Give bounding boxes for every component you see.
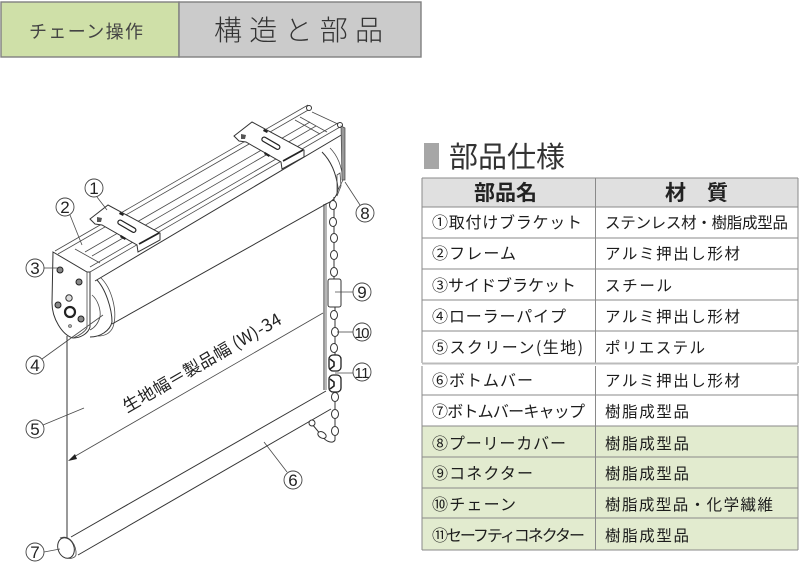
row 6: ⑥ボトムバー: [432, 367, 533, 391]
green rows background: [422, 426, 798, 550]
row 8: 樹脂成型品: [605, 432, 689, 454]
screen fabric edges: [67, 203, 326, 538]
row 2: アルミ押出し形材: [605, 242, 740, 264]
roller and pulley cover: [90, 148, 343, 337]
callout 2: 2: [60, 198, 70, 217]
row 8: [432, 430, 689, 454]
callout 7: 7: [30, 543, 40, 562]
row 3: ③サイドブラケット: [432, 272, 576, 296]
row 9: ⑨コネクター: [432, 460, 533, 484]
row 5: ⑤スクリーン(生地): [432, 334, 583, 358]
mounting bracket left: [90, 205, 160, 252]
table grid: [422, 178, 798, 550]
table header: 材 質: [665, 177, 728, 207]
callout 5: [26, 408, 84, 439]
callout 2: [56, 198, 82, 245]
width dimension arrow: [68, 313, 323, 461]
tab: chain operation: [1, 2, 179, 57]
callout 8: 8: [360, 204, 370, 223]
callout 8: [345, 182, 374, 223]
row 6: [432, 367, 740, 391]
row 1: ステンレス材・樹脂成型品: [605, 211, 788, 233]
callout 10: [337, 323, 371, 342]
row 4: ④ローラーパイプ: [432, 303, 566, 327]
callout 11: [335, 363, 371, 382]
section heading: parts specification: 部品仕様: [449, 134, 565, 176]
heading: structure and parts: [179, 2, 421, 57]
table header: [422, 177, 798, 207]
row 5: ポリエステル: [605, 336, 705, 358]
callout 4: 4: [30, 356, 40, 375]
row 7: 樹脂成型品: [605, 400, 689, 422]
callout 4: [26, 315, 103, 375]
row 11: ⑪セーフティコネクター: [432, 522, 585, 546]
row 8: ⑧プーリーカバー: [432, 430, 566, 454]
callout 3: [26, 259, 59, 278]
tab: chain operation: チェーン操作: [29, 18, 143, 44]
callout 3: 3: [30, 259, 40, 278]
row 9: [432, 460, 689, 484]
width dimension label: 生地幅＝製品幅 (W)-34: [117, 306, 285, 417]
product diagram: roller blind: [26, 105, 374, 562]
callout 7: [26, 543, 60, 562]
row 2: [432, 240, 740, 264]
table header: 部品名: [474, 177, 537, 207]
callout 10: 10: [354, 325, 370, 342]
row 11: 樹脂成型品: [605, 524, 689, 546]
row 7: ⑦ボトムバーキャップ: [432, 398, 585, 422]
heading: structure and parts: 構造と部品: [214, 9, 383, 49]
callout 5: 5: [30, 420, 40, 439]
parts table: [422, 177, 798, 550]
row 10: ⑩チェーン: [432, 491, 516, 515]
side bracket plate: [52, 252, 90, 338]
row 7: [432, 398, 689, 422]
frame rails: [55, 105, 345, 281]
row 2: ②フレーム: [432, 240, 516, 264]
row 4: [432, 303, 740, 327]
callout 9: 9: [357, 283, 367, 302]
callout 1: [85, 179, 107, 210]
row 3: スチール: [605, 274, 672, 296]
row 10: 樹脂成型品・化学繊維: [605, 493, 773, 515]
row 10: [432, 491, 773, 515]
row 9: 樹脂成型品: [605, 462, 689, 484]
chain with connectors: [309, 197, 341, 442]
mounting bracket right: [234, 122, 304, 169]
row 4: アルミ押出し形材: [605, 305, 740, 327]
callout 9: [335, 283, 371, 302]
row 5: [432, 334, 705, 358]
row 3: [432, 272, 672, 296]
bottom bar: [71, 391, 331, 555]
row 1: ①取付けブラケット: [432, 209, 582, 233]
callout 11: 11: [354, 365, 370, 382]
row 1: [432, 209, 788, 233]
callout 1: 1: [89, 179, 99, 198]
row 11: [432, 522, 689, 546]
header banner: [1, 2, 421, 57]
row 6: アルミ押出し形材: [605, 369, 740, 391]
callout 6: [264, 442, 302, 490]
bottom bar end cap: [55, 535, 77, 561]
callout 6: 6: [288, 471, 298, 490]
